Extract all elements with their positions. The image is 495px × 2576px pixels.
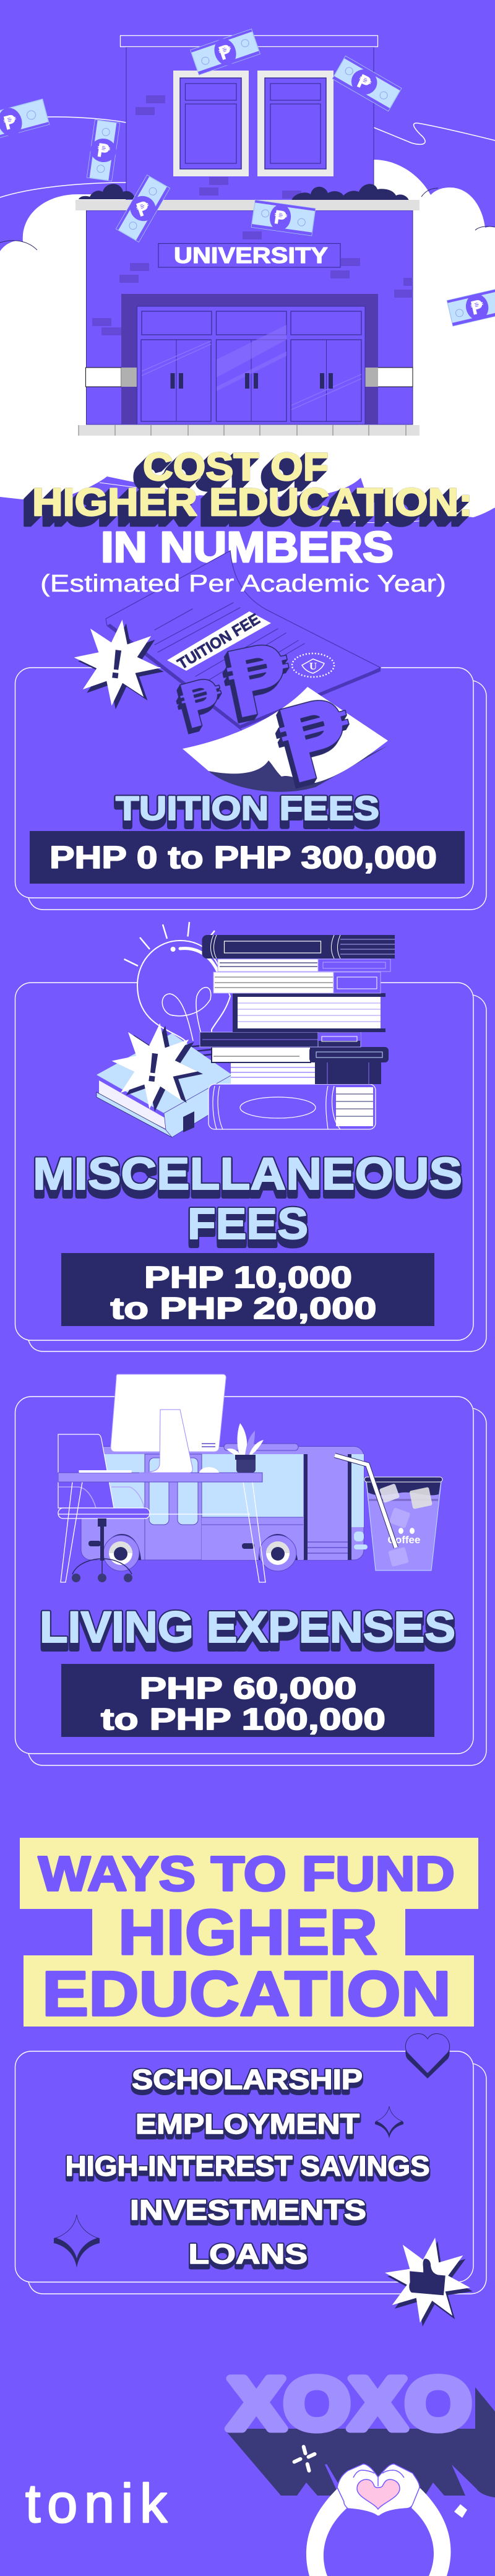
list: high-interest savings: HIGH-INTEREST SAVINGS xyxy=(66,2150,430,2182)
bill 3 xyxy=(0,98,50,143)
bill 4: ₱ xyxy=(95,140,111,163)
panel: living expenses xyxy=(15,1397,486,1765)
building lower floor xyxy=(75,200,420,424)
heading: living expenses: LIVING EXPENSES xyxy=(40,1603,455,1652)
bill 2 xyxy=(332,56,402,111)
heading: miscellaneous fees xyxy=(33,1149,462,1249)
university seal: U xyxy=(309,660,317,672)
heading: tuition fees: TUITION FEES xyxy=(116,789,379,827)
bill 7: ₱ xyxy=(468,296,486,320)
bill 2: ₱ xyxy=(353,71,374,96)
flying peso bills xyxy=(0,28,495,326)
list: investments: INVESTMENTS xyxy=(130,2194,366,2226)
amount bar: tuition: PHP 0 to PHP 300,000 xyxy=(50,840,437,875)
bus wheels xyxy=(103,1534,298,1571)
bill 5: ₱ xyxy=(134,197,153,222)
panel: tuition fees xyxy=(15,668,486,910)
monitor, keyboard and mouse xyxy=(79,1374,226,1473)
book 4 xyxy=(233,993,385,1032)
bricks lower xyxy=(92,231,413,335)
xoxo shadow xyxy=(227,2387,495,2497)
wind lines xyxy=(0,117,495,197)
entrance xyxy=(121,294,378,424)
clouds xyxy=(0,160,495,523)
title line: cost of: COST OF xyxy=(143,446,329,489)
illustration: bus, desk and coffee xyxy=(58,1374,442,1582)
main title xyxy=(32,446,473,571)
amount bar: living expenses: PHP 60,000 xyxy=(140,1672,356,1705)
tuition fee banner: TUITION FEE xyxy=(174,610,263,673)
list: employment: EMPLOYMENT xyxy=(136,2108,359,2140)
illustration: tuition fee document xyxy=(68,551,388,809)
document xyxy=(106,551,381,731)
starburst exclamation xyxy=(68,614,170,715)
starburst exclamation: ! xyxy=(144,1044,163,1091)
right window xyxy=(257,71,334,176)
heading: miscellaneous fees: FEES xyxy=(187,1200,308,1249)
iced coffee xyxy=(335,1455,442,1570)
list: scholarship: SCHOLARSHIP xyxy=(132,2064,363,2095)
heading block: ways to fund higher education xyxy=(20,1838,478,2029)
university sign: UNIVERSITY xyxy=(174,243,328,268)
heading block: ways to fund higher education: EDUCATION xyxy=(42,1958,451,2029)
light bulb xyxy=(124,922,230,1066)
shadow notch xyxy=(325,2464,339,2490)
book 3 xyxy=(213,972,381,993)
heart hands xyxy=(306,2464,451,2576)
amount bar: miscellaneous: to PHP 20,000 xyxy=(110,1292,376,1325)
book 8 xyxy=(209,1084,376,1129)
bill 6 xyxy=(251,200,316,236)
bill 1: ₱ xyxy=(216,40,235,65)
bill 3: ₱ xyxy=(1,111,19,135)
starburst exclamation: ! xyxy=(107,640,126,687)
book 7 xyxy=(231,1062,381,1084)
bill 4 xyxy=(87,120,120,181)
amount bar: living expenses: to PHP 100,000 xyxy=(101,1703,385,1736)
desk xyxy=(58,1473,265,1582)
subtitle: (Estimated Per Academic Year) xyxy=(40,571,446,597)
peso symbols xyxy=(171,622,367,809)
left window xyxy=(173,71,249,176)
heading: tuition fees: TUITION FEES xyxy=(116,789,379,827)
paper curl xyxy=(183,687,388,792)
amount bar: living expenses xyxy=(61,1664,434,1737)
heading block: ways to fund higher education: HIGHER xyxy=(118,1897,377,1968)
bricks xyxy=(136,95,301,199)
sparkles xyxy=(292,2444,467,2518)
heading: miscellaneous fees: FEES xyxy=(187,1200,308,1249)
bill 6: ₱ xyxy=(272,207,288,230)
illustration: books and light bulb xyxy=(97,922,395,1137)
peso symbols: ₱ xyxy=(216,622,302,741)
amount bar: miscellaneous xyxy=(61,1253,434,1326)
book 1 xyxy=(202,935,395,958)
title line: in numbers: IN NUMBERS xyxy=(101,523,394,571)
closing graphic: xoxo and heart hands xyxy=(227,2363,495,2576)
book stack xyxy=(200,935,395,1129)
base steps xyxy=(78,425,420,436)
entrance bands xyxy=(85,368,413,387)
building upper floor xyxy=(120,36,377,200)
book 2 xyxy=(218,959,390,971)
title line: higher education: HIGHER EDUCATION: xyxy=(32,481,473,524)
hero illustration: university xyxy=(0,28,495,523)
icon: sparkle large xyxy=(54,2215,100,2268)
panel: miscellaneous fees xyxy=(15,983,486,1351)
list: employment: EMPLOYMENT xyxy=(136,2108,359,2140)
bushes xyxy=(79,184,409,200)
logo: tonik: tonik xyxy=(25,2473,168,2534)
list: loans: LOANS xyxy=(188,2238,308,2270)
list: loans: LOANS xyxy=(188,2238,308,2270)
icon: heart xyxy=(405,2034,450,2078)
icon: thumbs up starburst xyxy=(377,2230,481,2334)
list: scholarship: SCHOLARSHIP xyxy=(132,2064,363,2095)
amount bar: miscellaneous: PHP 10,000 xyxy=(144,1261,352,1294)
heading: miscellaneous fees: MISCELLANEOUS xyxy=(33,1149,462,1199)
bill 7 xyxy=(447,286,495,326)
panel: ways to fund list xyxy=(15,2051,486,2294)
book 5 xyxy=(200,1032,361,1047)
book 6 xyxy=(212,1047,389,1062)
amount bar: tuition xyxy=(30,831,465,884)
blue book xyxy=(97,1033,232,1137)
bus xyxy=(81,1444,368,1560)
heading: miscellaneous fees: MISCELLANEOUS xyxy=(33,1149,462,1199)
bill 1 xyxy=(191,28,260,75)
peso symbols: ₱ xyxy=(265,673,367,809)
icon: sparkle small xyxy=(375,2106,403,2139)
iced coffee: Coffee xyxy=(388,1534,420,1546)
office chair xyxy=(58,1434,150,1582)
list: high-interest savings: HIGH-INTEREST SAVINGS xyxy=(66,2150,430,2182)
potted plant xyxy=(226,1423,264,1473)
bill 5 xyxy=(116,175,170,242)
list: investments: INVESTMENTS xyxy=(130,2194,366,2226)
heading: living expenses: LIVING EXPENSES xyxy=(40,1603,455,1652)
starburst exclamation xyxy=(106,1018,209,1117)
university seal xyxy=(292,653,334,677)
heading block: ways to fund higher education: WAYS TO FUND xyxy=(38,1846,455,1901)
peso symbols: ₱ xyxy=(171,663,232,744)
xoxo: XOXO xyxy=(228,2363,471,2445)
